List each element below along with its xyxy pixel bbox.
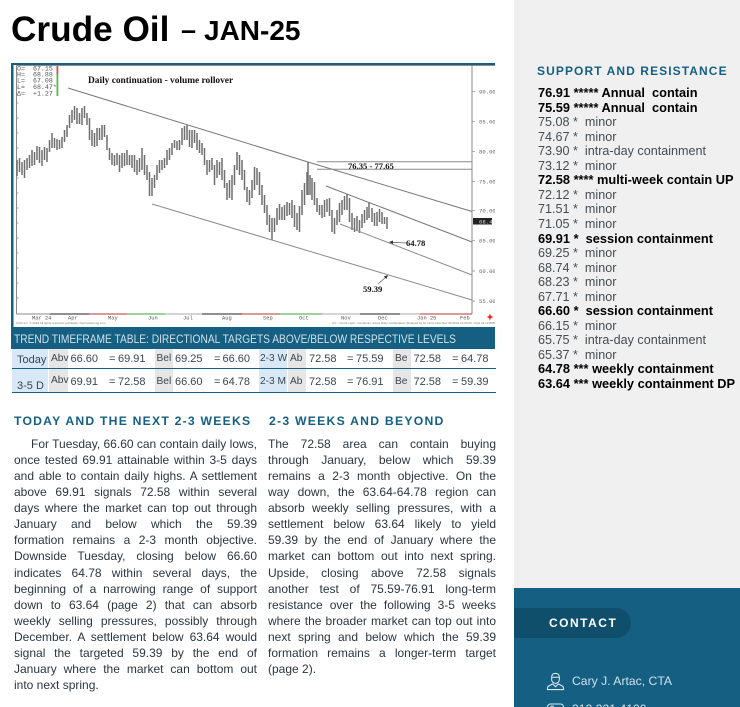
text block: 2-3 weeks and beyond: Upside, closing above 72.58 signals [268,566,496,580]
trend timeframe table: 75.59 [356,353,384,365]
trend timeframe table: Abv [51,353,69,364]
panel: support and resistance [514,0,740,588]
ohlc readout: L= [17,84,25,91]
title: Crude Oil [11,10,169,49]
text block: today and the next 2-3 weeks: days where the market can top out through [14,501,257,515]
level list: 73.12 * minor [538,159,616,173]
text block: 2-3 weeks and beyond: another test of 75.59-76.91 long-term [268,582,496,596]
month labels: Mar 24 [32,316,51,322]
text block: today and the next 2-3 weeks: once tested 69.91 attainable within 3-5 days [14,453,257,467]
trend timeframe table: 66.60 [222,353,250,365]
text block: today and the next 2-3 weeks: beginning of a narrowing range of support [14,582,257,596]
level list [538,85,735,391]
trend timeframe table: = [214,376,220,388]
heading: support and resistance: SUPPORT AND RESISTANCE [537,64,728,78]
text block: 2-3 weeks and beyond: absorb weekly selling pressures, with a [268,501,496,515]
level list: 65.75 * intra-day containment [538,333,706,347]
title [11,10,300,49]
trend timeframe table: = [452,353,458,365]
target label 59.39 with arrow: 59.39 [363,284,382,294]
level list: 66.60 * session containment [538,303,713,318]
trend timeframe table: = [214,353,220,365]
month labels: May [108,316,118,322]
contact pill [514,608,631,638]
level list: 66.15 * minor [538,319,616,333]
heading: today and the next 2-3 weeks: TODAY AND THE NEXT 2-3 WEEKS [14,414,251,428]
month labels: Oct [299,316,309,322]
ohlc readout: Δ= [17,90,25,98]
trend timeframe table [12,349,496,393]
trend timeframe table: 64.78 [222,376,250,388]
level list: 73.90 * intra-day containment [538,144,706,158]
contact name: Cary J. Artac, CTA [572,674,672,688]
trend timeframe table: 72.58 [414,376,441,388]
ohlc readout: 68.88 [33,72,53,78]
level list: 67.71 * minor [538,290,616,304]
trend timeframe table: = [347,353,353,365]
text block: 2-3 weeks and beyond: through January, below which 59.39 [268,453,496,467]
level list: 71.51 * minor [538,202,616,216]
text block: today and the next 2-3 weeks: January and below which the 59.39 [14,517,257,531]
month strip [50,313,472,315]
text block: 2-3 weeks and beyond: remains a 2-3 month objective. On the [268,469,496,483]
text block: today and the next 2-3 weeks: weekly selling pressures, possibly through [14,614,257,628]
month labels: Dec [378,316,388,322]
trend timeframe table: Bel [156,376,171,387]
month labels: Jul [183,316,193,322]
text block: 2-3 weeks and beyond: settlement below 63.64 likely to yield [268,517,496,531]
icon: person [546,672,564,690]
trend timeframe table: Ab [290,353,302,364]
text block: today and the next 2-3 weeks: For Tuesday, 66.60 can contain daily lows, [31,437,257,451]
ohlc readout: 67.15 [33,66,53,72]
table banner: TREND TIMEFRAME TABLE: DIRECTIONAL TARGETS ABOVE/BELOW RESPECTIVE LEVELS [14,332,456,346]
text block: today and the next 2-3 weeks: Downside Tuesday, closing below 66.60 [14,549,257,563]
copyright lines [16,321,496,325]
chart title: Daily continuation - volume rollover [88,76,233,86]
trend timeframe table: 2-3 W [260,353,287,364]
trend timeframe table: = [452,376,458,388]
ohlc readout: +1.27 [33,90,53,98]
text block: 2-3 weeks and beyond: (page 2). [268,662,316,676]
trend timeframe table: = [109,376,115,388]
text block: 2-3 weeks and beyond [268,437,496,676]
trend timeframe table: Ab [290,376,302,387]
month labels: Jun [148,316,158,322]
month labels: Sep [263,316,273,322]
trend timeframe table: 72.58 [118,376,146,388]
trend timeframe table: 76.91 [356,376,384,388]
text block: 2-3 weeks and beyond: market can bottom out into next spring. [268,549,496,563]
copyright lines: CQG Inc. © 2024 All rights reserved worldwide. http://www.cqg.com [16,321,106,325]
target label 64.78 with arrow: 64.78 [406,238,426,248]
icon: phone [547,704,564,707]
text block: today and the next 2-3 weeks: above 69.91 signals 72.58 within several [14,485,257,499]
axis ticks [16,88,475,301]
trend timeframe table: Be [395,376,407,387]
trend timeframe table: 69.91 [118,353,146,365]
ohlc readout: H= [17,72,25,78]
text block: today and the next 2-3 weeks: January where the market can bottom out [14,662,257,676]
trend timeframe table: = [109,353,115,365]
month labels [32,316,470,322]
trend timeframe table: 66.60 [70,353,98,365]
text block: today and the next 2-3 weeks: and able to contain daily highs. A settlement [14,469,257,483]
text block: 2-3 weeks and beyond: next spring and below which the 59.39 [268,630,496,644]
trend timeframe table: 2-3 M [260,376,286,387]
level list: 72.58 **** multi-week contain UP [538,172,734,187]
level list: 74.67 * minor [538,130,616,144]
trend timeframe table: = [347,376,353,388]
text block: 2-3 weeks and beyond: formation remains a longer-term target [268,646,496,660]
ohlc readout [17,66,58,98]
price chart [11,63,495,327]
ohlc readout: L= [17,78,25,84]
text block: today and the next 2-3 weeks: formation remains a 2-3 month objective. [14,533,257,547]
level list: 64.78 *** weekly containment [538,361,714,376]
ohlc readout: 67.08 [33,78,53,84]
target label 59.39 with arrow [363,275,388,294]
ohlc readout: 68.47* [33,84,57,91]
month labels: Apr [68,316,78,322]
month labels: Aug [222,316,232,322]
level list: 63.64 *** weekly containment DP [538,376,735,391]
text block: today and the next 2-3 weeks: December. A settlement below 63.64 would [14,630,257,644]
table banner [11,327,495,349]
text block: today and the next 2-3 weeks [14,437,257,692]
month labels: Jan 25 [417,316,436,322]
trend timeframe table: Be [395,353,407,364]
month labels: Nov [341,316,351,322]
ohlc readout: O= [17,66,25,72]
range label: 76.35 - 77.65 [348,161,394,171]
trend timeframe table: 3-5 D [17,380,44,392]
level list: 69.25 * minor [538,246,616,260]
text block: 2-3 weeks and beyond: where the broader market can top out into [268,614,496,628]
trend timeframe table: Today [17,354,46,366]
title: JAN-25 [204,15,300,46]
trend timeframe table: 72.58 [414,353,441,365]
trend channel lines [68,88,472,300]
title: – [181,15,196,45]
price bars [17,106,387,240]
text block: 2-3 weeks and beyond: 59.39 by the end of January where the [268,533,496,547]
price axis [473,89,496,305]
level list: 75.08 * minor [538,115,616,129]
trend timeframe table: 64.78 [461,353,489,365]
text block: today and the next 2-3 weeks: indicates 64.78 within several days, the [14,566,257,580]
copyright lines: Crz - Crude Light - Continuity, active Daily Continuation (Delayed by 10 mins) New Dec 09 2024 10:26:00, CQG 24.12.8065 [332,321,495,325]
level list: 65.37 * minor [538,348,616,362]
level list: 71.05 * minor [538,217,616,231]
level list: 68.74 * minor [538,261,616,275]
panel: contact [514,588,740,707]
trend timeframe table: Abv [51,375,69,386]
trend timeframe table: 72.58 [309,376,337,388]
level list: 72.12 * minor [538,188,616,202]
trend timeframe table: 72.58 [309,353,337,365]
heading: 2-3 weeks and beyond: 2-3 WEEKS AND BEYOND [269,414,445,428]
level list: 69.91 * session containment [538,230,713,246]
trend timeframe table: 59.39 [461,376,489,388]
month labels: Feb [460,316,470,322]
text block: 2-3 weeks and beyond: way down, the 63.64-64.78 region can [268,485,496,499]
text block: today and the next 2-3 weeks: into next spring. [14,678,99,692]
level list: 75.59 ***** Annual contain [538,100,698,115]
text block: 2-3 weeks and beyond: The 72.58 area can contain buying [268,437,496,451]
trend timeframe table: 69.91 [70,376,98,388]
level list: 76.91 ***** Annual contain [538,85,698,100]
trend timeframe table: 69.25 [175,353,203,365]
text block: today and the next 2-3 weeks: down to 63.64 (page 2) that can absorb [14,598,257,612]
trend timeframe table: 66.60 [175,376,203,388]
text block: today and the next 2-3 weeks: signal the targeted 59.39 by the end of [14,646,257,660]
contact heading: CONTACT [549,616,617,630]
red plus marker [488,314,492,320]
text block: 2-3 weeks and beyond: resistance over the following 3-5 weeks [268,598,496,612]
target label 64.78 with arrow [389,238,426,248]
trend timeframe table: Bel [156,353,171,364]
level list: 68.23 * minor [538,275,616,289]
